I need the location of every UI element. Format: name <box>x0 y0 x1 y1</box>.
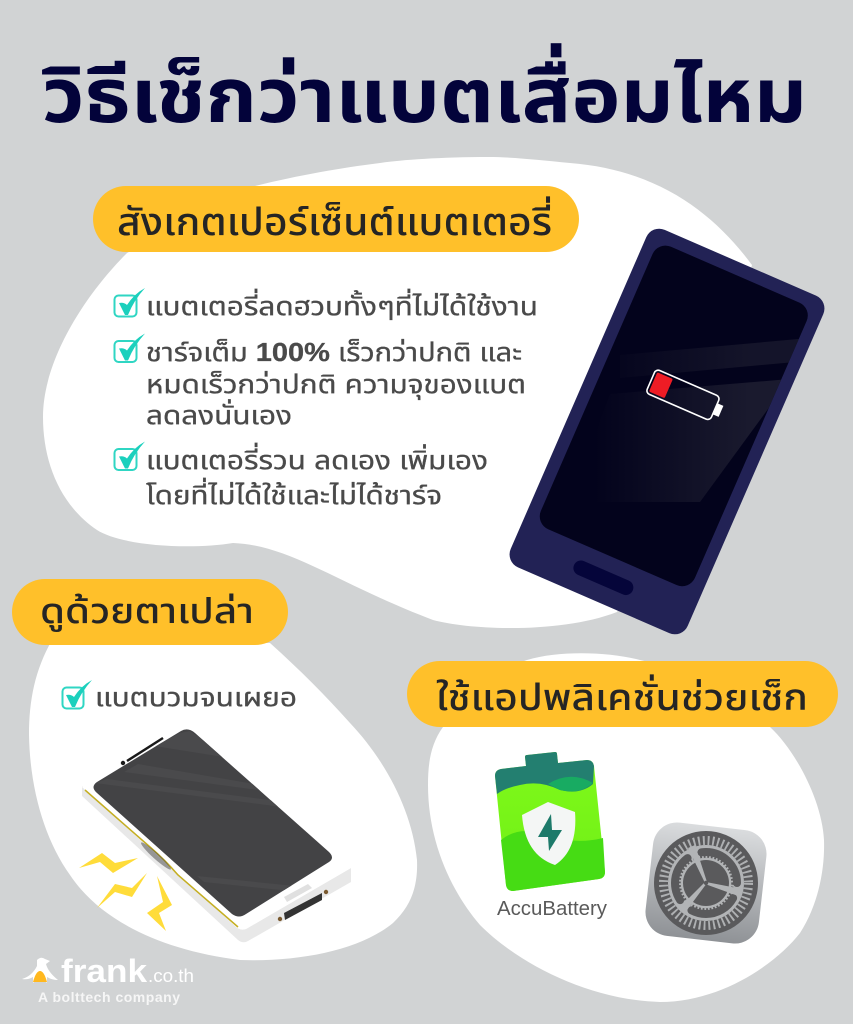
item 2: ชาร์จเต็ม 100% เร็วกว่าปกติ และ <box>146 337 522 367</box>
white blob: naked-eye panel <box>29 640 417 960</box>
logo: frank.co.th: .co.th <box>148 966 194 986</box>
heading pill: observe battery percentage <box>93 186 579 252</box>
item 3 <box>114 442 488 510</box>
heading pill: naked eye: ดูด้วยตาเปล่า <box>40 592 254 632</box>
item 2 <box>114 334 526 430</box>
item 3: แบตเตอรี่รวน ลดเอง เพิ่มเอง <box>146 442 488 475</box>
white blob: percentage panel <box>43 157 752 628</box>
icon: AccuBattery app <box>495 752 607 920</box>
item 2: หมดเร็วกว่าปกติ ความจุของแบต <box>146 369 526 400</box>
icon: frank bird <box>22 958 58 983</box>
icon: low battery <box>646 369 726 423</box>
item 2: ลดลงนั่นเอง <box>146 398 292 430</box>
item 1: แบตเตอรี่ลดฮวบทั้งๆที่ไม่ได้ใช้งาน <box>146 288 538 321</box>
illustration: swollen phone <box>82 729 351 942</box>
illustration: phone with low battery <box>510 228 824 634</box>
checklist: battery percentage symptoms <box>114 288 538 510</box>
app label: AccuBattery <box>497 898 607 920</box>
white blob: app panel <box>428 653 824 1002</box>
item 3: โดยที่ไม่ได้ใช้และไม่ได้ชาร์จ <box>146 477 442 510</box>
icon: iOS settings app <box>643 820 769 946</box>
checklist item: swollen battery: แบตบวมจนเผยอ <box>95 682 297 712</box>
heading pill: observe battery percentage: สังเกตเปอร์เซ็นต์แบตเตอรี่ <box>117 196 552 244</box>
logo: frank.co.th: frank <box>61 953 147 989</box>
title: วิธีเช็กว่าแบตเสื่อมไหม <box>42 43 807 139</box>
heading pill: naked eye <box>12 579 288 645</box>
logo: frank.co.th <box>22 953 194 1005</box>
heading pill: use apps <box>407 661 838 727</box>
heading pill: use apps: ใช้แอปพลิเคชั่นช่วยเช็ก <box>436 674 808 718</box>
icon: yellow sparks <box>79 853 172 931</box>
logo: frank.co.th: A bolttech company <box>38 989 180 1005</box>
